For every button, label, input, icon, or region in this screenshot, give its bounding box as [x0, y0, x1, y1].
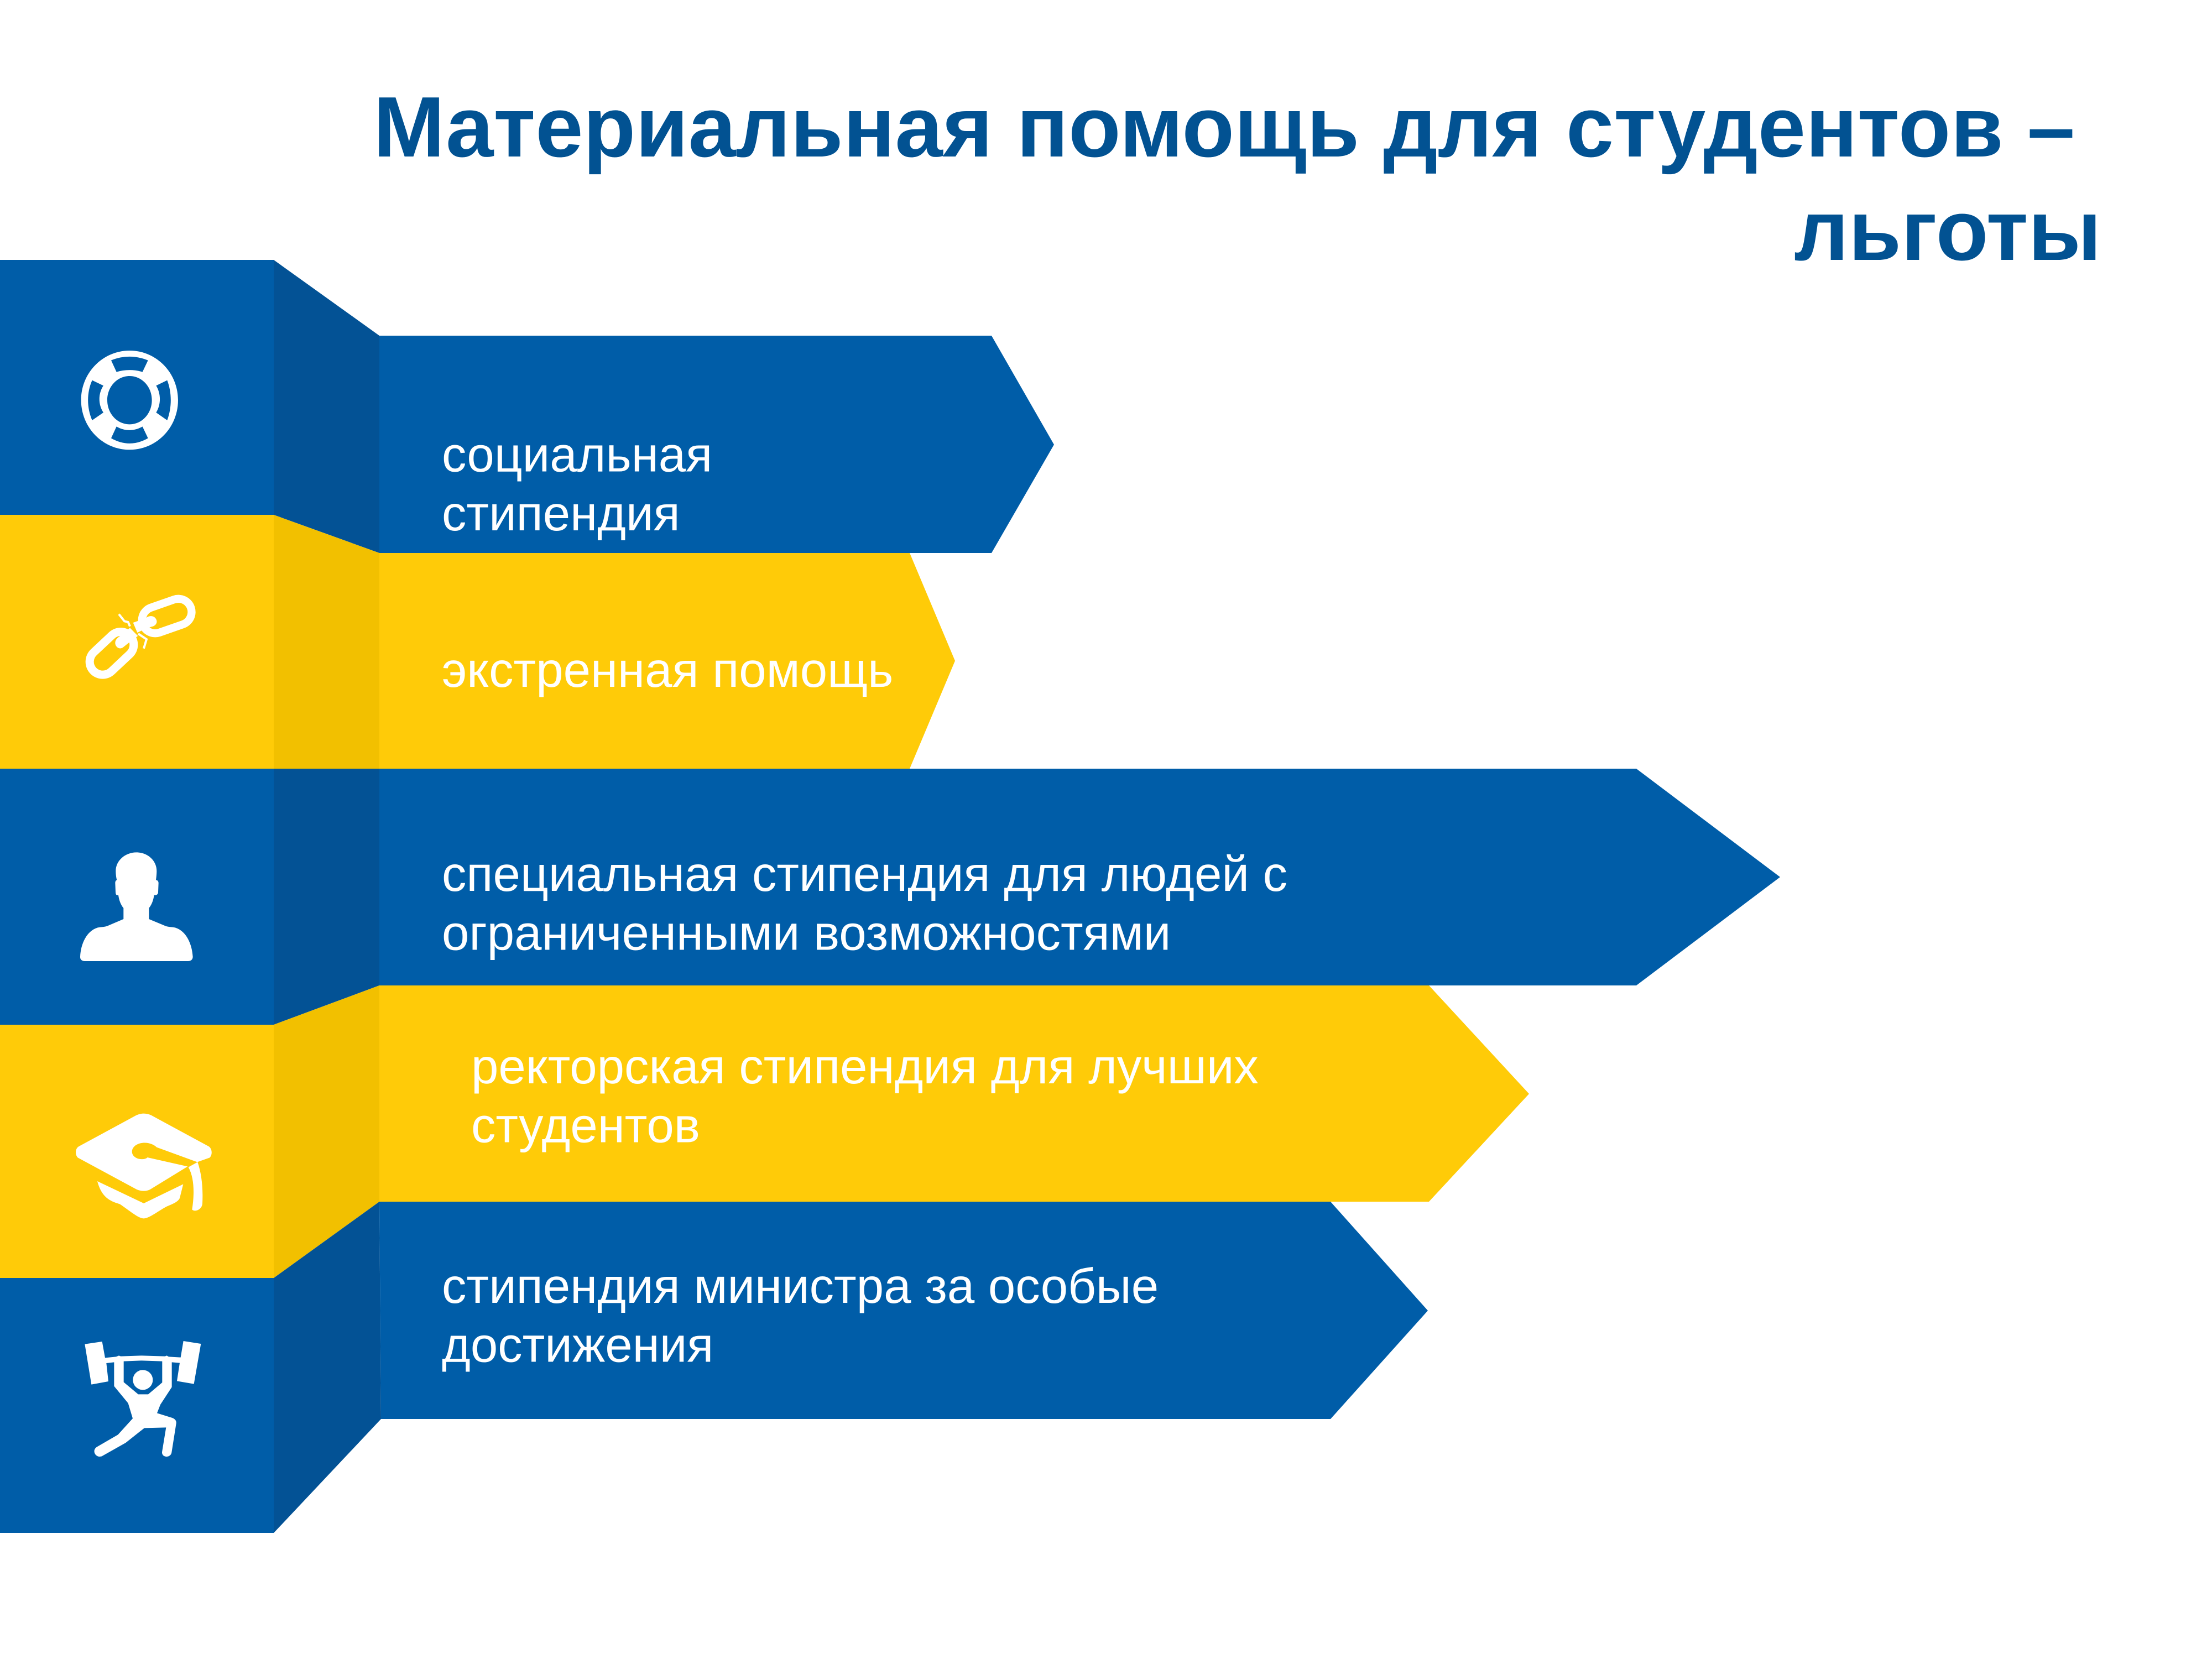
arrow 5: [379, 1202, 1428, 1419]
left block 1: [0, 260, 274, 515]
text 1: [442, 427, 712, 541]
title: Материальная помощь для студентов –: [373, 79, 2075, 175]
fold 2: [274, 515, 379, 769]
panel: row 4 rector scholarship: [0, 985, 1529, 1278]
text 5: стипендия министра за особые: [442, 1259, 1159, 1313]
icon: broken chain: [103, 612, 179, 662]
text 4: ректорская стипендия для лучших: [471, 1039, 1259, 1094]
text 3: [442, 847, 1287, 960]
text 1: стипендия: [442, 486, 680, 541]
text 1: социальная: [442, 427, 712, 482]
icon: life ring: [81, 351, 178, 450]
fold 4: [274, 985, 379, 1278]
panel: row 3 special scholarship: [0, 769, 1780, 1025]
left block 5: [0, 1278, 274, 1533]
icon: weightlifter: [85, 1341, 201, 1457]
icon: person: [80, 852, 193, 961]
text 5: [442, 1259, 1159, 1373]
panel: row 2 emergency aid: [0, 515, 955, 769]
panel: row 5 minister scholarship: [0, 1202, 1428, 1533]
text 4: студентов: [471, 1098, 700, 1152]
fold 3: [274, 769, 379, 1025]
text 5: достижения: [442, 1317, 713, 1373]
arrow 2: [379, 553, 955, 769]
left block 2: [0, 515, 274, 769]
fold 5: [274, 1202, 381, 1533]
left block 3: [0, 769, 274, 1025]
arrow 1: [379, 336, 1054, 553]
text 3: специальная стипендия для людей с: [442, 847, 1287, 901]
text 3: ограниченными возможностями: [442, 906, 1171, 960]
arrow 3: [379, 769, 1780, 985]
icon: graduation cap: [76, 1114, 212, 1218]
title: льготы: [1794, 182, 2101, 278]
left block 4: [0, 1025, 274, 1278]
fold 1: [274, 260, 379, 553]
arrow 4: [379, 985, 1529, 1202]
title: [373, 79, 2101, 278]
panel: row 1 social scholarship: [0, 260, 1054, 553]
text 2: экстренная помощь: [442, 643, 893, 697]
text 4: [471, 1039, 1259, 1152]
